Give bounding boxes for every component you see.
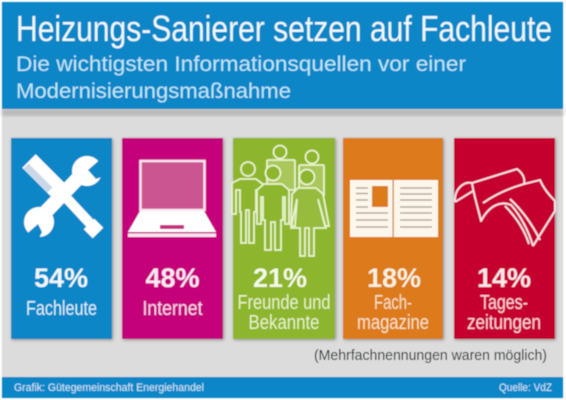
subtitle: Modernisierungsmaßnahme <box>16 80 291 103</box>
label: Fachmagazine: magazine <box>357 312 429 334</box>
label: Fachmagazine <box>357 292 429 334</box>
icon: laptop <box>128 161 216 237</box>
value: 14%: 14% <box>477 263 531 293</box>
subtitle: Die wichtigsten Informationsquellen vor einer <box>16 53 466 76</box>
panel: grey background <box>2 109 563 379</box>
panel: Internet <box>122 138 224 340</box>
value: 18%: 18% <box>367 263 421 293</box>
value: 48%: 48% <box>145 263 200 293</box>
label: Tageszeitungen <box>467 292 541 334</box>
label: Freunde und Bekannte <box>238 292 330 334</box>
subtitle <box>16 53 466 103</box>
panel: Fachleute <box>11 138 113 340</box>
label: Tageszeitungen: zeitungen <box>467 312 541 334</box>
icon: open magazine <box>350 180 438 237</box>
label: Tageszeitungen: Tages- <box>480 292 528 314</box>
panel: header <box>2 2 563 109</box>
panel: Freunde und Bekannte <box>232 138 336 340</box>
label: Internet: Internet <box>142 298 203 320</box>
label: Fachleute: Fachleute <box>26 298 97 320</box>
footer: credit: Grafik: Gütegemeinschaft Energiehandel <box>14 382 204 394</box>
footer bar <box>2 377 563 398</box>
value: 54%: 54% <box>34 263 88 293</box>
icon: screwdriver and wrench <box>22 156 107 243</box>
value: 21%: 21% <box>253 263 307 293</box>
label: Freunde und Bekannte: Bekannte <box>248 312 320 334</box>
icon: newspaper <box>455 169 555 246</box>
note: multiple answers: (Mehrfachnennungen waren möglich) <box>314 347 547 364</box>
icon: group of people <box>232 146 329 256</box>
panel: Fachmagazine <box>343 138 444 340</box>
panel: Tageszeitungen <box>454 138 556 340</box>
label: Fachmagazine: Fach- <box>374 292 412 314</box>
label: Freunde und Bekannte: Freunde und <box>238 292 330 314</box>
footer: source: Quelle: VdZ <box>499 382 552 394</box>
